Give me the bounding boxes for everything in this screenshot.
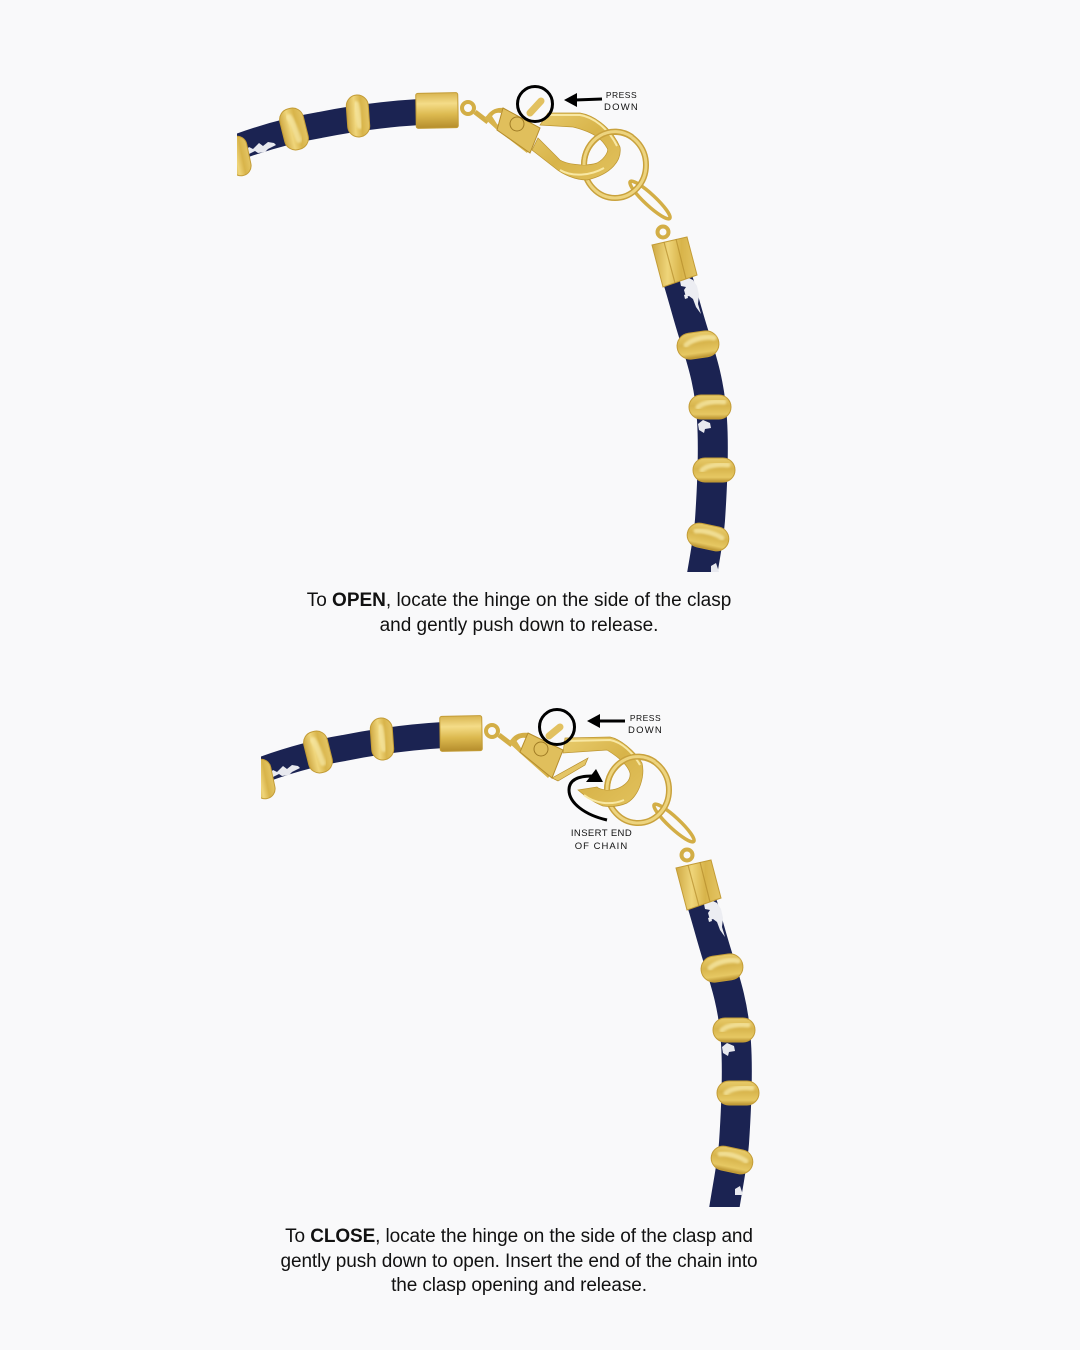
caption: close instructions bbox=[281, 1226, 757, 1296]
panel: open instructions bbox=[225, 86, 735, 600]
bracelet chain: close step bbox=[249, 716, 759, 1223]
bracelet chain: open step bbox=[225, 93, 735, 600]
label: insert end of chain: INSERT END bbox=[571, 828, 632, 839]
label: press down: DOWN bbox=[604, 102, 639, 113]
arrow: press down bbox=[564, 93, 602, 107]
caption: open instructions: and gently push down to release. bbox=[380, 614, 658, 636]
arrow: insert end of chain bbox=[569, 769, 607, 820]
arrow: press down bbox=[587, 714, 625, 728]
label: insert end of chain: OF CHAIN bbox=[575, 841, 628, 852]
label: press down: PRESS bbox=[606, 90, 637, 100]
caption: close instructions: the clasp opening and release. bbox=[391, 1275, 647, 1296]
icon: press circle bbox=[518, 86, 552, 122]
caption: close instructions: gently push down to open. Insert the end of the chain into bbox=[281, 1250, 757, 1272]
label: press down: PRESS bbox=[630, 713, 661, 723]
caption: close instructions: To CLOSE, locate the hinge on the side of the clasp and bbox=[285, 1226, 753, 1247]
clasp: closed lobster clasp with jump ring bbox=[462, 101, 673, 238]
panel: close instructions bbox=[249, 710, 759, 1223]
clasp: open lobster clasp with jump ring bbox=[486, 725, 697, 860]
caption: open instructions bbox=[307, 590, 731, 636]
caption: open instructions: To OPEN, locate the hinge on the side of the clasp bbox=[307, 590, 731, 611]
icon: press circle bbox=[540, 710, 574, 744]
label: press down: DOWN bbox=[628, 725, 663, 736]
